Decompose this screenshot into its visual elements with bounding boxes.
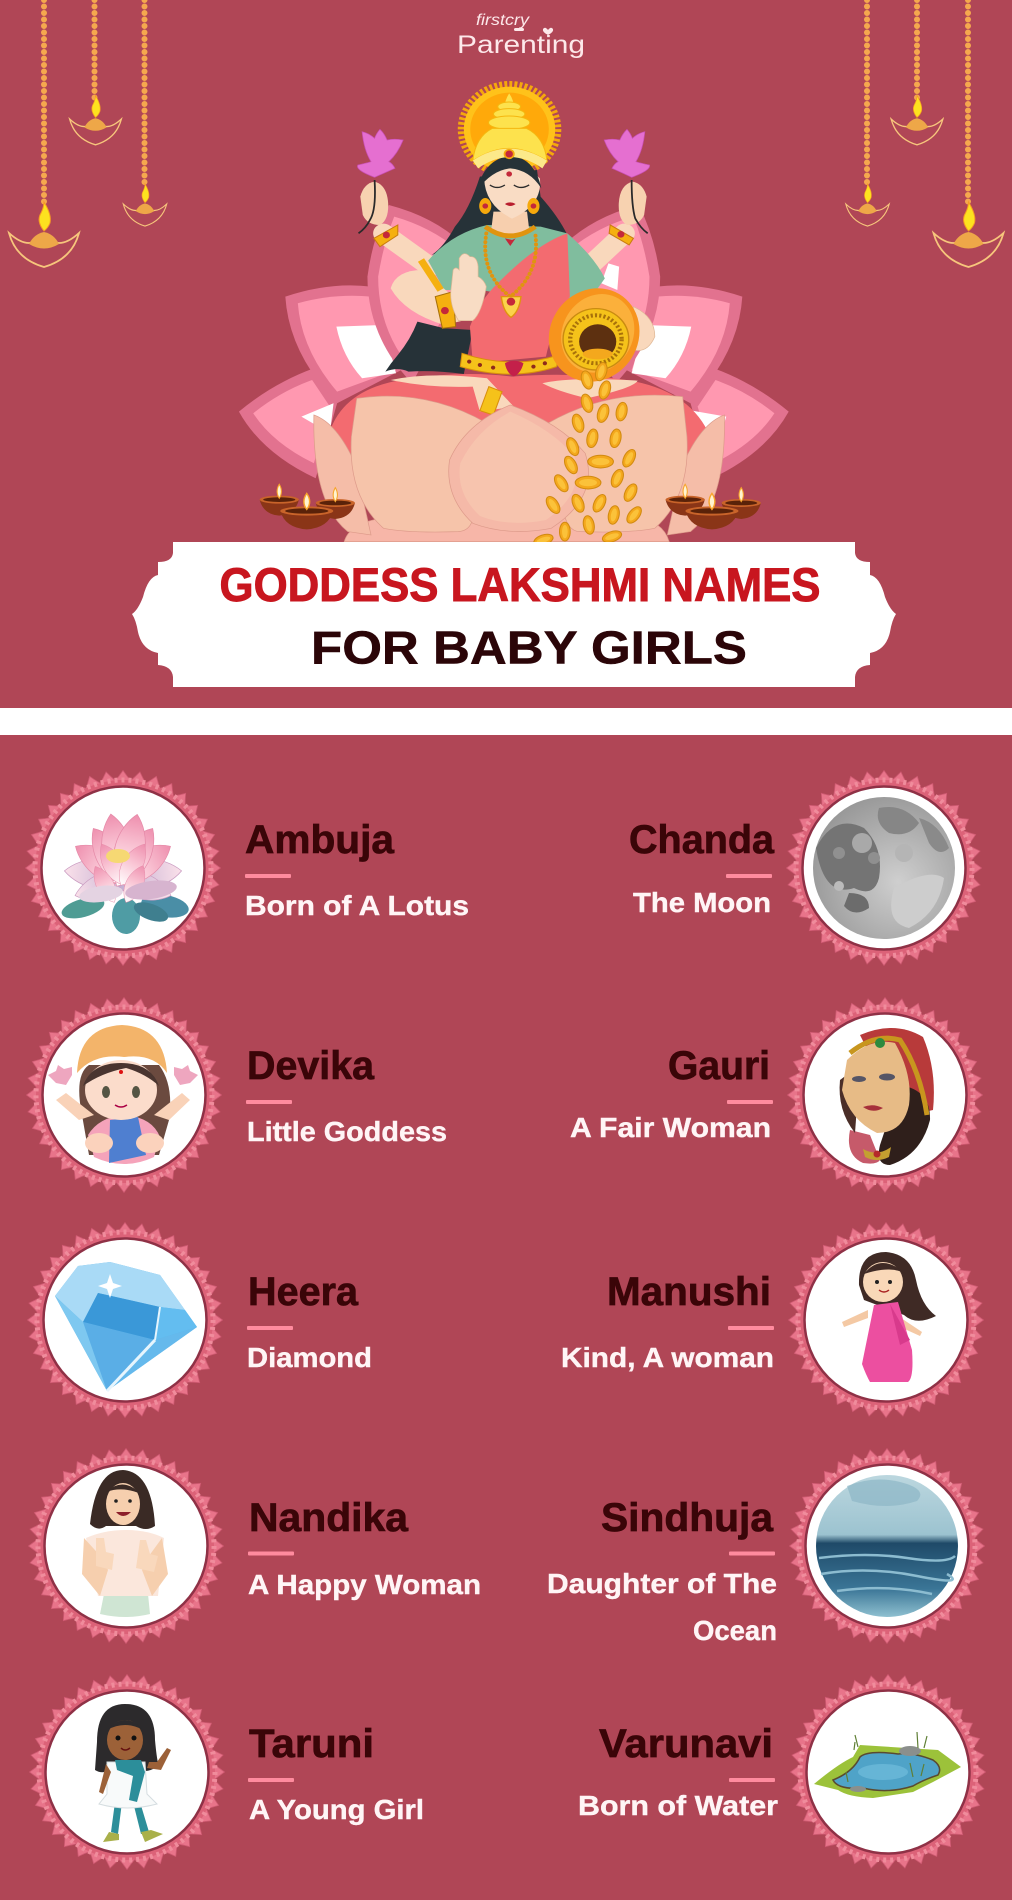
blouse	[428, 225, 605, 303]
icon: young girl	[95, 1704, 171, 1842]
illustration: goddess Lakshmi on lotus	[239, 85, 789, 548]
diyas left	[260, 484, 355, 529]
icon: woman in pink saree	[842, 1252, 936, 1382]
label: Varunavi: Varunavi	[599, 1722, 773, 1766]
white divider band	[0, 708, 1012, 735]
label: Sindhuja: Sindhuja	[601, 1496, 774, 1540]
medallion: lotus	[11, 758, 229, 979]
label: Nandika: Nandika	[249, 1496, 409, 1540]
title line 1: GODDESS LAKSHMI NAMES	[220, 558, 820, 611]
label: Varunavi: Born of Water	[578, 1790, 778, 1821]
label: Heera: Heera	[248, 1270, 359, 1314]
label: Gauri: A Fair Woman	[570, 1112, 771, 1143]
label: Gauri: Gauri	[668, 1044, 770, 1088]
label: Manushi: Kind, A woman	[561, 1342, 774, 1373]
icon: little goddess	[48, 1025, 198, 1164]
label: Manushi	[561, 1270, 774, 1373]
necklaces	[485, 227, 536, 317]
label: Devika	[246, 1044, 447, 1147]
icon: ocean	[816, 1475, 958, 1617]
neck and face	[477, 156, 541, 237]
icon: moon	[813, 797, 955, 939]
medallion: diamond	[13, 1210, 231, 1431]
icon: happy woman	[82, 1470, 168, 1617]
label: Chanda: The Moon	[633, 887, 771, 918]
medallion: pond	[776, 1662, 994, 1883]
lotus seat	[314, 395, 725, 542]
medallion: little goddess	[12, 985, 230, 1206]
hanging lamps left	[9, 0, 167, 267]
icon: lotus	[59, 811, 191, 934]
medallion: young girl	[15, 1662, 233, 1883]
saree drape	[470, 233, 570, 363]
medallion: fair woman	[773, 985, 991, 1206]
label: Taruni: A Young Girl	[249, 1794, 424, 1825]
coin pot and pouring hand	[535, 276, 655, 394]
lotus flower left	[357, 129, 403, 177]
label: Gauri	[570, 1044, 773, 1143]
falling coins	[532, 361, 644, 548]
crossed legs and saree	[328, 374, 710, 463]
label: Chanda	[629, 818, 775, 918]
label: Varunavi	[578, 1722, 778, 1821]
logo: Parenting	[457, 31, 585, 59]
belt	[460, 353, 558, 377]
title banner	[132, 542, 896, 687]
label: Devika: Little Goddess	[247, 1116, 447, 1147]
crown	[473, 93, 547, 168]
label: Devika: Devika	[247, 1044, 375, 1088]
label: Sindhuja: Ocean	[693, 1615, 777, 1646]
label: Taruni: Taruni	[249, 1722, 374, 1766]
icon: woman in red veil	[840, 1028, 934, 1165]
label: Heera: Diamond	[247, 1342, 372, 1373]
logo: firstcry	[476, 12, 530, 29]
medallion: moon	[772, 758, 990, 979]
medallion: happy woman	[14, 1436, 232, 1657]
label: Taruni	[248, 1722, 424, 1825]
label: Ambuja	[245, 818, 469, 921]
diyas right	[666, 484, 761, 529]
label: Manushi: Manushi	[607, 1270, 771, 1314]
label: Nandika: A Happy Woman	[248, 1569, 481, 1600]
icon: diamond	[55, 1262, 197, 1391]
label: Sindhuja	[547, 1496, 777, 1646]
long hair	[385, 170, 567, 374]
label: Ambuja: Born of A Lotus	[245, 890, 469, 921]
raised arms and hands	[359, 180, 648, 267]
icon: pond	[814, 1732, 961, 1798]
label: Nandika	[248, 1496, 481, 1600]
medallion: ocean	[775, 1436, 993, 1657]
label: Sindhuja: Daughter of The	[547, 1568, 777, 1599]
logo	[457, 12, 585, 59]
front arm and raised palm	[391, 254, 486, 328]
lotus flower right	[604, 129, 650, 177]
label: Heera	[247, 1270, 372, 1373]
halo	[462, 85, 557, 174]
hanging lamps right	[846, 0, 1004, 267]
medallion: woman in pink saree	[774, 1210, 992, 1431]
label: Ambuja: Ambuja	[245, 818, 395, 862]
label: Chanda: Chanda	[629, 818, 775, 862]
background lotus petals	[239, 205, 789, 478]
title line 2: FOR BABY GIRLS	[311, 622, 747, 674]
